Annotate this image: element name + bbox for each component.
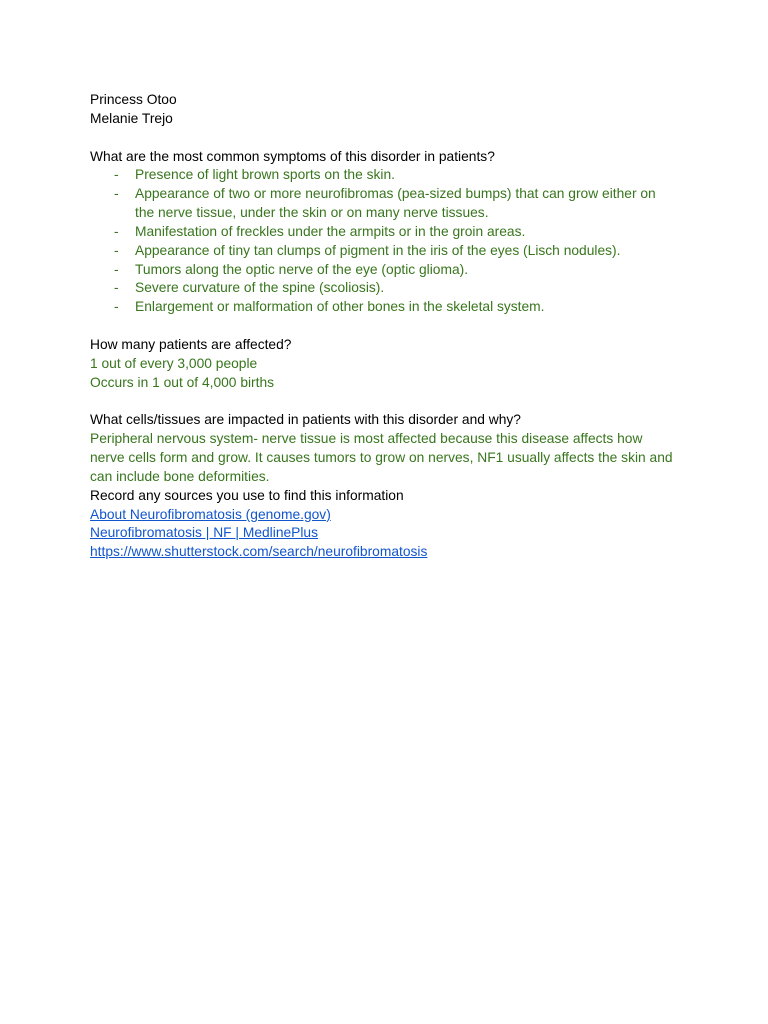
tissues answer: can include bone deformities. [90,469,269,484]
prevalence answer [90,356,274,390]
symptoms list: Enlargement or malformation of other bones in the skeletal system. [135,299,545,314]
prevalence answer: 1 out of every 3,000 people [90,356,257,371]
sources heading: Record any sources you use to find this information [90,488,404,503]
symptoms list: Tumors along the optic nerve of the eye (optic glioma). [135,262,468,277]
authors: Princess Otoo [90,92,177,107]
symptoms list: Severe curvature of the spine (scoliosis). [135,280,384,295]
tissues answer: nerve cells form and grow. It causes tumors to grow on nerves, NF1 usually affects the skin and [90,450,673,465]
symptoms list: the nerve tissue, under the skin or on many nerve tissues. [135,205,489,220]
tissues answer [90,431,673,484]
symptoms list: Presence of light brown sports on the skin. [135,167,395,182]
sources links [90,507,428,559]
symptoms list [114,167,656,314]
tissues answer: Peripheral nervous system- nerve tissue is most affected because this disease affects how [90,431,642,446]
sources links: Neurofibromatosis | NF | MedlinePlus [90,525,318,540]
prevalence answer: Occurs in 1 out of 4,000 births [90,375,274,390]
authors [90,92,177,126]
authors: Melanie Trejo [90,111,173,126]
sources links: About Neurofibromatosis (genome.gov) [90,507,331,522]
symptoms list: Manifestation of freckles under the armpits or in the groin areas. [135,224,525,239]
question: cells/tissues: What cells/tissues are impacted in patients with this disorder and why? [90,412,521,427]
question: symptoms: What are the most common symptoms of this disorder in patients? [90,149,495,164]
question: prevalence: How many patients are affected? [90,337,291,352]
document text [90,92,673,559]
symptoms list: Appearance of two or more neurofibromas (pea-sized bumps) that can grow either on [135,186,656,201]
sources links: https://www.shutterstock.com/search/neurofibromatosis [90,544,427,559]
symptoms list: Appearance of tiny tan clumps of pigment in the iris of the eyes (Lisch nodules). [135,243,620,258]
